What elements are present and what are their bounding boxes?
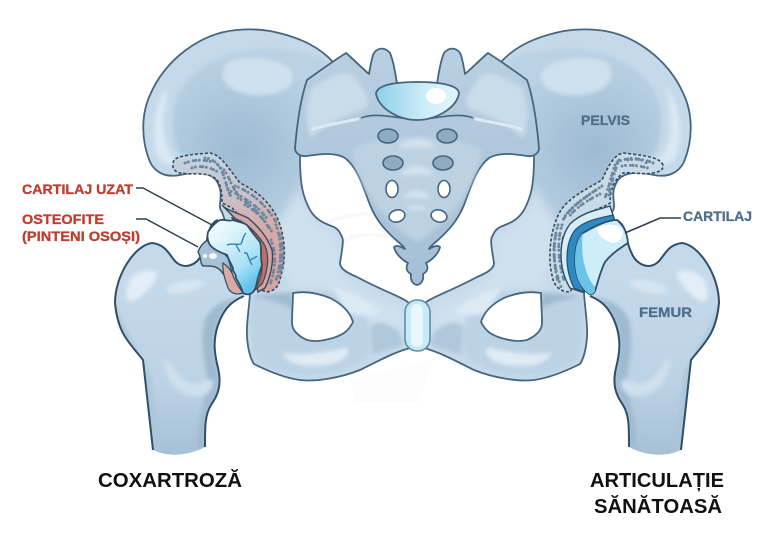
worn femoral head — [207, 220, 262, 294]
label: cartilaj: CARTILAJ — [683, 209, 752, 224]
title: coxartroză: COXARTROZĂ — [98, 469, 242, 492]
left acetabulum: worn bone — [173, 153, 284, 292]
sacral foramina — [378, 129, 457, 224]
healthy cartilage, right hip — [561, 206, 628, 294]
leader lines — [136, 188, 681, 247]
intervertebral disc — [376, 82, 459, 120]
pubic symphysis — [405, 300, 430, 351]
left femur — [115, 220, 244, 455]
right femur — [590, 220, 719, 455]
right pelvis half — [424, 29, 691, 381]
decorative watermark — [300, 214, 440, 402]
title: articulație sănătoasă: ARTICULAȚIE — [590, 470, 724, 492]
osteophytes — [198, 240, 238, 293]
sacrum — [295, 49, 539, 285]
title: articulație sănătoasă — [590, 470, 724, 518]
label: pinteni osoși: (PINTENI OSOȘI) — [22, 229, 140, 244]
label: cartilaj uzat: CARTILAJ UZAT — [22, 182, 134, 197]
label: pelvis: PELVIS — [581, 113, 630, 128]
label: osteofite: OSTEOFITE — [22, 212, 104, 227]
worn cartilage layers, left hip — [198, 205, 273, 294]
title: articulație sănătoasă: SĂNĂTOASĂ — [594, 495, 722, 518]
left pelvis half — [143, 29, 410, 381]
cartilage cracks — [227, 233, 257, 265]
label: femur: FEMUR — [639, 305, 692, 320]
right acetabulum: healthy bone — [550, 153, 663, 292]
